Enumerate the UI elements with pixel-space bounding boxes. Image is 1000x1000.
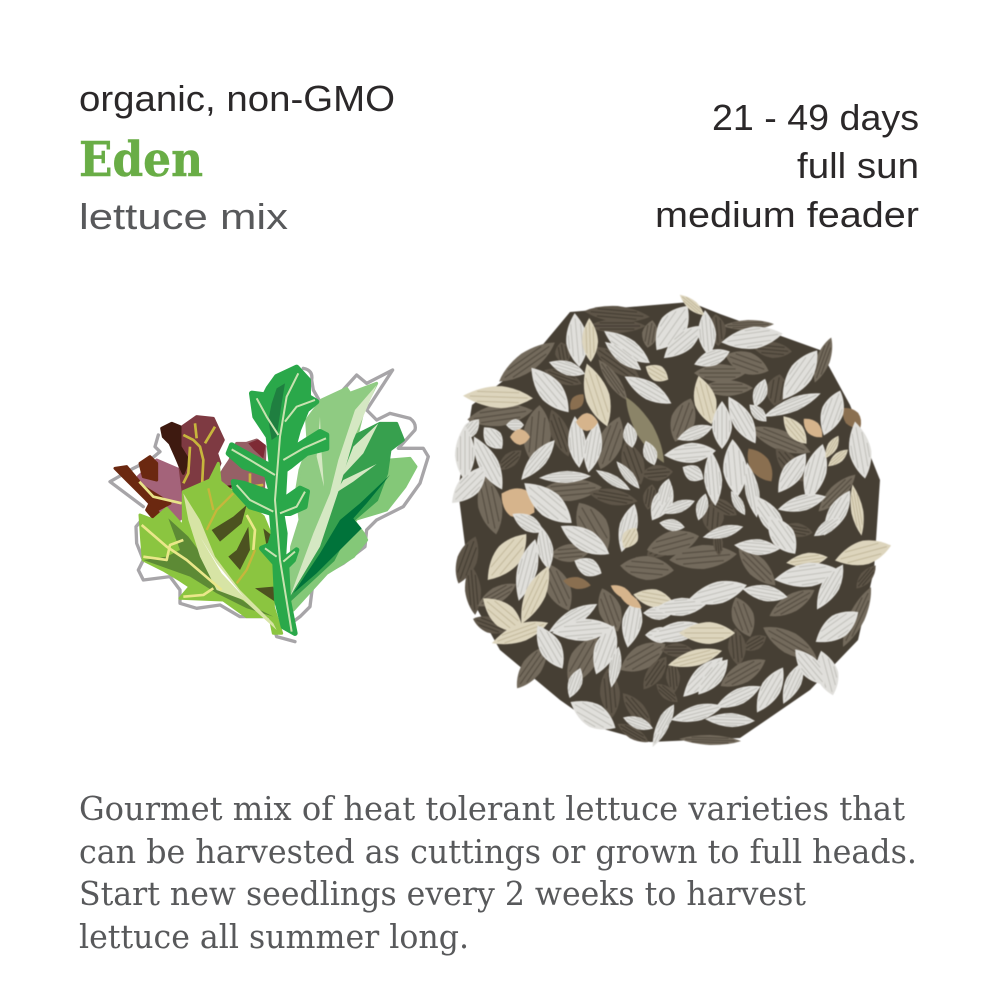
description text [79, 789, 917, 956]
description text: Gourmet mix of heat tolerant lettuce varieties that [79, 789, 905, 828]
seed pile photo [444, 291, 894, 749]
heading: organic, non-GMO: organic, non-GMO [79, 78, 395, 119]
green lettuce [140, 463, 282, 633]
description text: Start new seedlings every 2 weeks to harvest [79, 874, 806, 913]
title: Eden: Eden [79, 132, 203, 188]
growing facts: full sun [797, 145, 919, 186]
icon: lettuce leaves illustration [110, 367, 428, 642]
arugula [228, 367, 327, 633]
pale seeds [564, 312, 590, 368]
subtitle: lettuce mix: lettuce mix [79, 196, 288, 237]
growing facts [655, 97, 919, 235]
growing facts: 21 - 49 days [712, 97, 919, 138]
description text: can be harvested as cuttings or grown to full heads. [79, 832, 917, 871]
grey outline [110, 368, 428, 642]
description text: lettuce all summer long. [79, 917, 469, 956]
back leaves [288, 383, 377, 600]
red lettuce [138, 460, 183, 527]
dark base [458, 302, 880, 742]
growing facts: medium feader [655, 194, 919, 235]
dark seeds [583, 303, 651, 325]
